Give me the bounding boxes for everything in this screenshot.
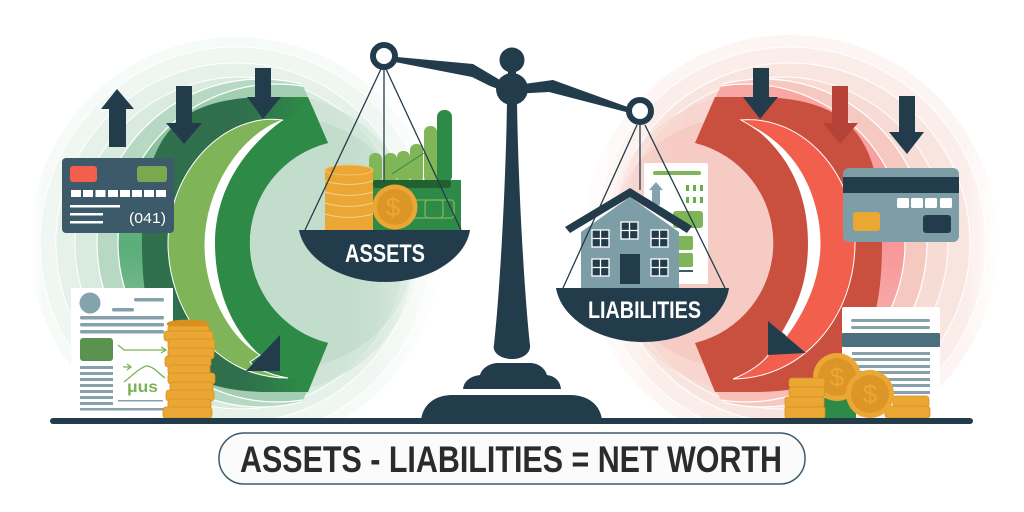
panel: assets concentric arc — [40, 48, 416, 418]
dollar sign: $ — [863, 379, 878, 409]
white crescent right — [752, 126, 820, 336]
icon: left document — [71, 288, 173, 417]
icon: right document — [842, 307, 940, 412]
scale right ring — [629, 100, 651, 122]
dark triangle arrowhead left — [246, 335, 280, 371]
liabilities label: LIABILITIES — [588, 297, 701, 324]
strings — [305, 69, 725, 288]
white crescent left — [205, 120, 283, 355]
dollar sign: $ — [386, 192, 401, 222]
panel: liabilities concentric arc — [605, 35, 986, 418]
icon: up arrow — [101, 89, 134, 147]
scale pivot — [500, 48, 524, 72]
red strong rings — [716, 78, 928, 408]
scale left ring — [373, 45, 395, 67]
light red crescent — [733, 120, 855, 379]
scale lower base — [421, 395, 602, 421]
icon: liabilities statement — [644, 163, 708, 284]
dollar sign: $ — [830, 362, 845, 392]
icon: red down arrow — [823, 86, 858, 144]
icon: right credit card — [843, 168, 959, 242]
ground line — [50, 418, 973, 424]
document chart label: μus — [127, 379, 158, 396]
green strong rings — [96, 78, 312, 408]
red outer disc — [616, 112, 681, 374]
right pan — [556, 288, 729, 342]
green arrow body — [142, 97, 328, 392]
icon: left coin stack — [163, 320, 215, 418]
formula pill — [219, 433, 805, 484]
red arrow body — [695, 97, 882, 392]
panel: balance scale — [299, 45, 729, 421]
icon: down arrow left one — [166, 86, 202, 144]
dark triangle arrowhead right — [768, 321, 806, 355]
green background rings — [40, 48, 412, 418]
scale column — [494, 100, 530, 359]
icon: down arrow right three — [889, 96, 924, 154]
scale upper base — [463, 363, 561, 389]
red background rings — [605, 35, 986, 418]
icon: assets pile — [325, 110, 461, 230]
light green crescent — [168, 119, 288, 378]
formula text: ASSETS - LIABILITIES = NET WORTH — [240, 439, 782, 480]
green inner disc — [250, 122, 408, 364]
icon: down arrow left two — [247, 68, 281, 119]
icon: house — [565, 188, 692, 288]
scale beam — [395, 57, 640, 113]
icon: dark credit card — [62, 158, 174, 233]
green inner arrow band — [205, 106, 328, 378]
red inner disc — [618, 122, 774, 364]
icon: down arrow right one — [743, 68, 778, 119]
icon: right coins and cash — [785, 353, 930, 418]
assets label: ASSETS — [345, 240, 425, 268]
green outer disc — [309, 98, 408, 387]
card number: (041) — [129, 210, 166, 227]
left pan — [299, 230, 470, 282]
